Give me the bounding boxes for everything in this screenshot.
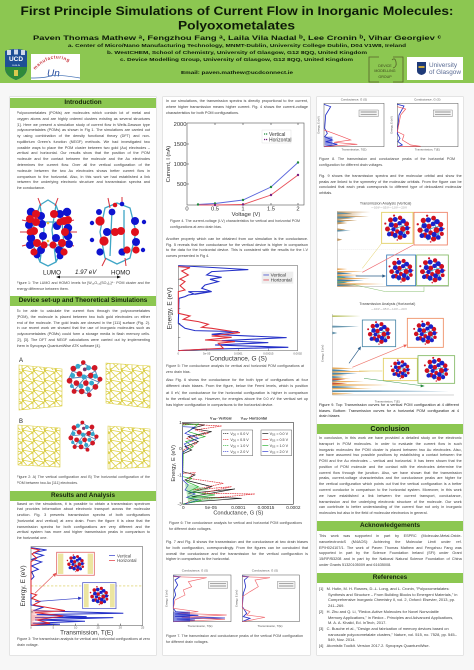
figure 5: conductance chart: 5e-05 xyxy=(203,351,211,355)
title and authors xyxy=(20,6,454,75)
figure 6: conductance at drain voltages xyxy=(171,416,301,517)
text: transmission and current: characteristics for both POM configurations. xyxy=(166,111,239,115)
text: conclusion: transport in POM molecules. In order to evaluate the current flow in such xyxy=(319,442,462,446)
caption: figure 5: zero drain bias. xyxy=(166,370,191,374)
figure 6: conductance at drain voltages: = 2.0 V xyxy=(236,450,249,454)
heading: device set-up xyxy=(10,296,156,306)
text: introduction: the conductance. xyxy=(16,186,45,190)
caption: figure 8: Figure 8. The transmission and conductance peaks of the horizontal POM xyxy=(319,157,455,161)
caption: figure 4: Figure 4. The current-voltage (I-V) characteristics for vertical and horizontal POM xyxy=(170,219,300,223)
caption: figure 6 xyxy=(169,521,302,531)
logo: device modelling group: GROUP xyxy=(378,75,392,79)
figure 6: conductance at drain voltages: 0 xyxy=(182,505,185,510)
text: conclusion: we have assumed two possible positions by establishing a contact between the xyxy=(319,453,462,457)
text: device set-up: polyoxometalates (POMs) could form a storage media in flash memory cells. xyxy=(16,332,150,336)
text: conclusion: inorganic molecules the POM cluster is placed between two Au electrodes. Also, xyxy=(319,448,462,452)
caption: figure 5 xyxy=(166,364,304,374)
figure 7: vertical transmission and conductance plots: Conductance, G (S) xyxy=(182,568,208,572)
text: drain bias conductance: at 0 eV, the conductance for the horizontal configuration is higher in comparison xyxy=(166,391,308,395)
figure 4: current-voltage chart xyxy=(166,122,304,218)
text: drain bias conductance: to the vertical set up. However, for energies above the 0.0 eV the vertical set up xyxy=(166,397,308,401)
figure 6: conductance at drain voltages: 0.00015 xyxy=(258,505,275,510)
figure 8: horizontal transmission and conductance plots: Conductance, G (S) xyxy=(414,98,441,102)
figure 2: vertical and horizontal device configurations: A xyxy=(19,358,23,364)
caption: figure 4 xyxy=(170,219,300,229)
text: figures 7 and 8 intro: Fig. 7 and Fig. 8 shows the transmission and the conductance at two drain biases xyxy=(166,540,308,544)
figure 6: conductance at drain voltages: V xyxy=(230,438,233,442)
figure 3: transmission chart: 5 xyxy=(52,626,54,630)
logo: manufacturing: manufacturing xyxy=(34,56,70,70)
text: references: [4] Atomistix Toolkit. Version 2017.2. Synopsys QuantumWise. xyxy=(319,643,430,648)
caption: figure 8: configuration for different drain voltages. xyxy=(319,162,383,166)
figure 4: current-voltage chart: 0.5 xyxy=(211,206,219,212)
figure 2: vertical and horizontal device configurations: B xyxy=(19,419,23,425)
figure 5: conductance chart: 0.00015 xyxy=(263,351,274,355)
figure 6: conductance at drain voltages: - Vertical xyxy=(216,416,232,420)
text: conclusion: POM and the Au electrodes – vertical and horizontal. It has been shown that the xyxy=(319,459,462,463)
figure 6: conductance at drain voltages: = 1.0 V xyxy=(236,444,249,448)
text: introduction: oxygen atoms and are highly ordered clusters existing as several structures xyxy=(16,117,150,121)
heading: introduction: Introduction xyxy=(64,99,102,106)
figure 9 top: vertical transmission analysis xyxy=(337,202,449,292)
figure 6: conductance at drain voltages: - Horizontal xyxy=(247,416,267,420)
figure 6: conductance at drain voltages: 0 xyxy=(179,446,182,451)
text: conclusion: molecules but also in the field of molecular electronics in general. xyxy=(319,511,428,515)
text: device set-up: [2], [3]. The DFT and NEGF calculations were carried out by implementing xyxy=(16,338,150,342)
figure 3: transmission chart: 20 xyxy=(119,626,122,630)
text: references: M. A. A. Khalid, Ed. InTech, 2017. xyxy=(328,620,386,625)
text: references: [1] M. Hutin, M. H. Rosnes, D.-L. Long, and L. Cronin, "Polyoxometalates: xyxy=(319,586,450,591)
text: introduction: by using combination of the density functional theory (DFT) and non- xyxy=(16,134,150,138)
figure 4: current-voltage chart: 1 xyxy=(241,206,245,212)
figure 4: current-voltage chart: 2000 xyxy=(174,122,186,128)
caption: figure 1: energy difference between them. xyxy=(16,287,69,291)
text: acknowledgements: EP/H024107/1. The work of Paven Thomas Mathew and Fengzhou Fang was xyxy=(319,546,462,550)
heading: acknowledgements: Acknowledgements xyxy=(360,522,420,529)
figure 4: current-voltage chart: 1000 xyxy=(174,162,186,168)
text: transmission and current: In our simulations, the transmission spectra is directly proportional to the current, xyxy=(166,99,308,103)
text: conclusion: position of POM molecule and the contact with the electrodes determine the xyxy=(319,465,462,469)
caption: figure 6: Figure 6: The conductance analysis for vertical and horizontal POM configurations xyxy=(169,521,302,525)
figure 6: conductance at drain voltages: DS xyxy=(213,419,217,421)
text: acknowledgements: This work was supported in part by ESPRC (Molecular-Metal-Oxide- xyxy=(319,534,462,538)
figure 9 top: vertical transmission analysis: — 0.0 V — 0.5 V — 1.0 V — 2.0 V xyxy=(371,207,407,209)
figure 5: conductance chart xyxy=(167,265,302,363)
figure 4: current-voltage chart: 500 xyxy=(177,182,186,188)
figure 1: LUMO and HOMO orbitals: LUMO xyxy=(43,270,61,276)
text: drain bias conductance: different drain biases. From the figure, below the Fermi levels, which is position xyxy=(166,384,308,388)
figure 6: conductance at drain voltages: V xyxy=(270,444,272,448)
figure 3: transmission chart: 0 xyxy=(30,626,32,630)
title and authors: Email: paven.mathew@ucdconnect.ie xyxy=(181,70,294,75)
caption: figure 3: Figure 3: The transmission analysis for vertical and horizontal configurations at zero xyxy=(17,637,150,641)
figure 9 bottom: horizontal transmission analysis: — 0.0 V — 0.5 V — 1.0 V — 2.0 V xyxy=(371,309,407,311)
figure 8: horizontal transmission and conductance plots xyxy=(316,98,458,152)
figure 8: horizontal transmission and conductance plots: Energy, E (eV) xyxy=(316,116,320,134)
text: transmission and current xyxy=(166,99,308,115)
text: references: 549, Nov. 2014. xyxy=(328,637,356,642)
text: acknowledgements: under Grants 51320105009 and 61635008. xyxy=(319,563,391,567)
panel: left column xyxy=(10,97,156,655)
logo: University of Glasgow: University xyxy=(429,62,458,69)
logo: UCD shield xyxy=(5,49,27,80)
figure 4: current-voltage chart: Vertical xyxy=(269,132,285,138)
caption: figure 2: POM between two Au [111] electrodes. xyxy=(16,481,78,485)
caption: figure 1 xyxy=(16,281,150,291)
panel: middle column: Energy, E (eV) xyxy=(165,590,169,607)
figure 6: conductance at drain voltages: V xyxy=(210,416,213,420)
caption: figure 3 xyxy=(17,637,150,647)
figure 9 top: vertical transmission analysis: Transmission Analysis (Vertical) xyxy=(360,202,411,206)
text: transmission and current: where higher transmission means higher current. Fig. 4 shows the current-voltage xyxy=(166,105,308,109)
text: molecular orbitals xyxy=(319,174,462,195)
text: results and analysis xyxy=(16,502,150,540)
text: figures 7 and 8 intro: overall the conductance and the transmission for the vertical configuration is xyxy=(166,552,308,556)
title and authors: b. WestCHEM, School of Chemistry, University of Glasgow, G12 8QQ, United Kingdom xyxy=(107,50,367,55)
text: introduction: molecule and the contact between the molecule and the Au electrodes xyxy=(16,157,150,161)
figure 6: conductance at drain voltages: V xyxy=(230,444,233,448)
text: device set-up: In our recent work we showed that the use of inorganic molecules such as xyxy=(16,326,150,330)
figure 5: conductance chart: Energy, E (eV) xyxy=(167,287,174,329)
text: molecular orbitals: concluded that each peak corresponds to different type of delocalized molecular xyxy=(319,185,462,189)
figure 3: transmission chart: 25 xyxy=(141,626,145,630)
figure 6: conductance at drain voltages: V xyxy=(230,450,233,454)
text: acknowledgements: 15/RP/B3208 and in part by the National Natural Science Foundation of China xyxy=(319,557,462,561)
text: device set-up: them in Synopsys QuantumWise ATK software [4]. xyxy=(16,344,101,348)
text: references: nanoscale polyoxometalate clusters," Nature, vol. 515, no. 7528, pp. 545– xyxy=(328,632,457,637)
text: conductance introduction: to the data for the horizontal device. This is consistent with the results for the I-V xyxy=(166,248,308,252)
figure 3: transmission chart: Transmission, T(E) xyxy=(60,629,113,636)
figure 6: conductance at drain voltages: V xyxy=(270,432,272,436)
figure 5: conductance chart: Vertical xyxy=(271,273,286,278)
figure 4: current-voltage chart: 1.5 xyxy=(267,206,275,212)
figure 9 bottom: horizontal transmission analysis xyxy=(321,302,456,403)
figure 3: transmission chart: Vertical xyxy=(117,553,131,558)
figure 6: conductance at drain voltages: DS xyxy=(244,419,247,421)
text: results and analysis: that provides information about electronic transport across the molecular xyxy=(16,507,150,511)
heading: conclusion: Conclusion xyxy=(370,424,410,433)
text: device set-up: end of the molecule. The gold leads are cleaved in the [111] surface (Fig. 2). xyxy=(16,321,150,325)
figure 6: conductance at drain voltages: V xyxy=(241,416,244,420)
figure 6: conductance at drain voltages: DS xyxy=(233,441,236,443)
text: conclusion xyxy=(319,436,462,515)
caption: figure 4: configurations at zero drain bias. xyxy=(170,225,222,229)
figure 6: conductance at drain voltages: = 0.0 V xyxy=(236,432,249,436)
text: references: [3] C. Busche et al., "Design and fabrication of memory devices based on xyxy=(319,626,449,631)
figure 8: horizontal transmission and conductance plots: Transmission, T(E) xyxy=(341,148,367,152)
figure 6: conductance at drain voltages: -1 xyxy=(178,473,182,478)
figure 6: conductance at drain voltages: DS xyxy=(272,435,276,437)
figure 6: conductance at drain voltages: DS xyxy=(233,453,236,455)
caption: figure 1: Figure 1: The LUMO and HOMO levels for [W₁₈O₅₄(SO₃)₂]⁴⁻ POM cluster and the xyxy=(16,281,150,285)
text: figures 7 and 8 intro: higher in comparison to the horizontal. xyxy=(166,557,230,561)
caption: figure 9 xyxy=(319,403,459,418)
text: references: Comprehensive Inorganic Chemistry II, vol. 2, Oxford: Elsevier, 2013, pp. xyxy=(328,597,455,602)
heading: introduction xyxy=(10,98,156,108)
logo: manufacturing: Un xyxy=(47,68,60,80)
text: references: 241–269. xyxy=(328,603,344,608)
text: figures 7 and 8 intro xyxy=(166,540,308,561)
caption: figure 7: for different drain voltages. xyxy=(166,640,208,644)
text: introduction: possible ways to place the POM cluster between two gold (Au) electrodes – xyxy=(16,146,150,150)
heading: results and analysis xyxy=(10,491,156,501)
figure 3: transmission chart: Horizontal xyxy=(117,558,137,563)
figure 6: conductance at drain voltages: Energy, E (eV) xyxy=(171,445,177,482)
text: introduction: molecule between the two Au electrodes shows better current flow in xyxy=(16,169,150,173)
caption: figure 7: Figure 7. The transmission and conductance peaks of the vertical POM configuration xyxy=(166,634,303,638)
text: acknowledgements: supported in part by the Science Foundation Ireland (SFI) under Grant xyxy=(319,551,462,555)
logo: University of Glasgow: of Glasgow xyxy=(429,69,461,76)
panel: middle column xyxy=(163,97,310,655)
figure 6: conductance at drain voltages: DS xyxy=(272,453,276,455)
figure 5: conductance chart: 0.0001 xyxy=(234,351,243,355)
figure 8: horizontal transmission and conductance plots: Energy, E (eV) xyxy=(390,116,394,134)
figure 6: conductance at drain voltages: DS xyxy=(233,447,236,449)
figure 5: conductance chart: Horizontal xyxy=(271,278,292,283)
logo: device modelling group xyxy=(368,56,404,82)
figure 6: conductance at drain voltages: = 0.5 V xyxy=(236,438,249,442)
text: references: Synthesis and Structure – From Building Blocks to Emergent Materials," in xyxy=(328,592,457,597)
panel: right column xyxy=(317,97,463,655)
figure 1: LUMO and HOMO orbitals: 1.97 eV xyxy=(75,269,97,276)
text: references: Memory Applications," in Redox - Principles and Advanced Applications, xyxy=(328,615,453,620)
figure 7: vertical transmission and conductance plots xyxy=(165,568,300,628)
figure 7: vertical transmission and conductance plots: Energy, E (eV) xyxy=(234,590,238,607)
caption: figure 2: Figure 2: A) The vertical configuration and B) The horizontal configuration of the xyxy=(16,475,150,479)
figure 7: vertical transmission and conductance plots: Transmission, T(E) xyxy=(257,624,283,628)
figure 3: transmission chart: 15 xyxy=(96,626,100,630)
heading: device set-up: Device set-up and Theoretical Simulations xyxy=(19,297,147,304)
text: drain bias conductance: has higher configuration in comparisons to the horizontal device. xyxy=(166,403,273,407)
title and authors: Polyoxometalates xyxy=(178,20,295,32)
text: molecular orbitals: peaks are linked to the symmetry of the molecular orbitals. From the figure can be xyxy=(319,180,462,184)
title and authors: Paven Thomas Mathew ᵃ, Fengzhou Fang ᵃ, Laila Vila Nadal ᵇ, Lee Cronin ᵇ, Vihar Georgiev ᶜ xyxy=(33,35,442,42)
text: drain bias conductance xyxy=(166,378,308,407)
logo: UCD shield: UCD xyxy=(9,56,23,63)
figure 6: conductance at drain voltages: = 1.0 V xyxy=(275,444,289,448)
figure 4: current-voltage chart: 2 xyxy=(296,206,300,212)
text: molecular orbitals: Fig. 9 shows the transmission spectra and the molecular orbital and show the xyxy=(319,174,462,178)
figure 8: horizontal transmission and conductance plots: Transmission, T(E) xyxy=(415,148,440,152)
text: results and analysis: junction. Fig. 3 presents transmission spectra of both configurations xyxy=(16,513,150,517)
text: conclusion: In conclusion, in this work we have provided a detailed study on the electronic xyxy=(319,436,462,440)
logo: device modelling group: MODELLING xyxy=(374,69,396,73)
text: conclusion: can contribute to better understanding of the current flow not only in inorganic xyxy=(319,505,462,509)
logo: UCD shield: DUBLIN xyxy=(12,65,20,67)
text: introduction: comparison to the horizontal. Also, in this work we had established a link xyxy=(16,175,150,179)
figure 8: horizontal transmission and conductance plots: Conductance, G (S) xyxy=(341,98,367,102)
figure 7: vertical transmission and conductance plots: Transmission, T(E) xyxy=(187,624,213,628)
heading: references xyxy=(317,573,463,582)
caption: figure 6: for different drain voltages. xyxy=(169,527,212,531)
heading: conclusion xyxy=(317,424,463,434)
figure 5: conductance chart: 0 xyxy=(178,351,180,355)
figure 4: current-voltage chart: Current, I (nA) xyxy=(166,146,172,182)
heading: results and analysis: Results and Analysis xyxy=(51,492,115,499)
text: results and analysis: the horizontal one. xyxy=(16,536,47,540)
figure 2: vertical and horizontal device configurations xyxy=(18,358,150,470)
text: introduction: between the underlying electronic structure and transmission spectra and xyxy=(16,180,150,184)
caption: figure 9: drain biases xyxy=(319,414,339,418)
text: results and analysis: transmission spectra for both configurations are very different and the xyxy=(16,525,150,529)
figure 3: transmission chart: 10 xyxy=(74,626,78,630)
figure 6: conductance at drain voltages: DS xyxy=(272,447,276,449)
figure 9 bottom: horizontal transmission analysis: Transmission Analysis (Horizontal) xyxy=(359,302,415,306)
figure 1: LUMO and HOMO orbitals xyxy=(20,197,146,278)
figure 6: conductance at drain voltages: 0.0001 xyxy=(231,505,246,510)
text: introduction xyxy=(16,111,150,190)
panel: right column: Transmission, T(E) xyxy=(375,399,400,403)
text: conclusion: current conductor in comparison to the horizontal system. Moreover, in this work xyxy=(319,488,462,492)
figure 6: conductance at drain voltages: V xyxy=(270,438,272,442)
text: results and analysis: vertical system has more and higher transmission peaks in comparison to xyxy=(16,530,150,534)
figure 3: transmission chart: Energy, E (eV) xyxy=(20,565,27,606)
title and authors: a. Center of Micro/Nano Manufacturing Technology, MNMT-Dublin, University College Dublin, D04 V1W8, Ireland xyxy=(68,43,407,48)
text: introduction: polyoxometalates (POMs) as shown in Fig 1. The simulations are carried out xyxy=(16,128,150,132)
figure 6: conductance at drain voltages: = 0.5 V xyxy=(275,438,289,442)
text: results and analysis: Based on the simulations, it is possible to obtain a transmission spectrum xyxy=(16,502,150,506)
figure 6: conductance at drain voltages: -3 xyxy=(178,501,182,506)
text: introduction: Polyoxometalates (POMs) are molecules which contain lot of metal and xyxy=(16,111,150,115)
figure 3: transmission chart xyxy=(20,546,145,636)
text: conductance introduction: curves presented in Fig 4. xyxy=(166,254,209,258)
heading: acknowledgements xyxy=(317,521,463,531)
logo: manufacturing xyxy=(31,54,80,80)
header banner xyxy=(0,0,474,83)
logo: device modelling group: DEVICE xyxy=(378,64,392,68)
text: conclusion: we have established a link between the current transport, conductance, xyxy=(319,494,462,498)
figure 6: conductance at drain voltages: 1 xyxy=(179,420,182,425)
figure 4: current-voltage chart: 0 xyxy=(185,206,189,212)
figure 6: conductance at drain voltages: V xyxy=(230,432,233,436)
figure 6: conductance at drain voltages: V xyxy=(270,450,272,454)
text: molecular orbitals: orbitals. xyxy=(319,191,332,195)
logo: University of Glasgow xyxy=(407,57,463,80)
text: introduction: equilibrium Green's function (NEGF) methods. We had investigated two xyxy=(16,140,150,144)
text: conclusion: peaks, current-voltage characteristics and the conductance peaks are higher for xyxy=(319,476,462,480)
caption: figure 3: drain voltage. xyxy=(17,643,39,647)
text: drain bias conductance: Also Fig. 6 shows the conductance for the both type of configurations at four xyxy=(166,378,308,382)
text: acknowledgements: nanoelectronicS (M4AOS): Achieving the Molecular Limit under ref. xyxy=(319,540,462,544)
figure 6: conductance at drain voltages: = 2.0 V xyxy=(275,450,289,454)
figure 6: conductance at drain voltages: 0.0002 xyxy=(286,505,301,510)
caption: figure 5: Figure 5: The conductance analysis for vertical and horizontal POM configurations at xyxy=(166,364,304,368)
text: device set-up: To be able to calculate the current flow through the polyoxometalates xyxy=(16,309,150,313)
text: acknowledgements xyxy=(319,534,462,567)
text: conclusion: current flow through the junction. Also, we have shown that the transmission xyxy=(319,471,462,475)
figure 6: conductance at drain voltages: = 0.0 V xyxy=(275,432,289,436)
text: device set-up xyxy=(16,309,150,348)
figure 5: conductance chart: 0.0002 xyxy=(293,351,302,355)
text: figures 7 and 8 intro: for both configuration, correspondingly. From the figures can be concluded that xyxy=(166,546,308,550)
text: device set-up: (POM), the molecule is placed between two bulk gold electrodes on either xyxy=(16,315,150,319)
figure 7: vertical transmission and conductance plots: Conductance, G (S) xyxy=(252,568,278,572)
text: conclusion: transmission and the underlying electronic structure of the molecule. Our work xyxy=(319,500,462,504)
text: introduction: vertical and horizontal. Our results show that the position of the POM xyxy=(16,151,150,155)
figure 5: conductance chart: Conductance, G (S) xyxy=(210,356,267,363)
text: conclusion: the vertical configuration which points out that the vertical configuration is a better xyxy=(319,482,462,486)
figure 6: conductance at drain voltages: DS xyxy=(233,435,236,437)
heading: references: References xyxy=(373,574,407,581)
caption: figure 2 xyxy=(16,475,150,485)
figure 4: current-voltage chart: Horizontal xyxy=(269,138,292,144)
figure 4: current-voltage chart: 1500 xyxy=(174,142,186,148)
caption: figure 7 xyxy=(166,634,303,644)
figure 4: current-voltage chart: Voltage (V) xyxy=(232,212,260,218)
text: introduction: [1]. Here we present a simulation study of current flow in Wells-Dawson type xyxy=(16,123,150,127)
caption: figure 8 xyxy=(319,157,455,167)
text: conductance introduction: Fig. 5 reveals that the conductance for the vertical device is higher in comparison xyxy=(166,243,308,247)
figure 6: conductance at drain voltages: 5e-05 xyxy=(205,505,217,510)
panel: right column: Energy, E (eV) xyxy=(321,345,325,362)
title and authors: c. Device Modelling Group, University of Glasgow, G12 8QQ, United Kingdom xyxy=(120,57,353,62)
figure 1: LUMO and HOMO orbitals: HOMO xyxy=(111,270,130,276)
text: introduction: determines the current flow. Over all the vertical configuration of the xyxy=(16,163,150,167)
text: results and analysis: (horizontal and vertical) at zero drain. From the figure it is clear that the xyxy=(16,519,150,523)
title and authors: First Principle Simulations of Current Flow in Inorganic Molecules: xyxy=(20,6,454,18)
text: conductance introduction xyxy=(166,237,308,258)
text: references: [2] H. Zhu and Q. Li, "Redox-Active Molecules for Novel Nonvolatile xyxy=(319,609,439,614)
text: conductance introduction: Another property which can be obtained from our simulation is the conductance. xyxy=(166,237,308,241)
figure 6: conductance at drain voltages: Conductance, G (S) xyxy=(213,511,263,517)
text: references xyxy=(319,586,458,648)
figure 6: conductance at drain voltages: DS xyxy=(272,441,276,443)
